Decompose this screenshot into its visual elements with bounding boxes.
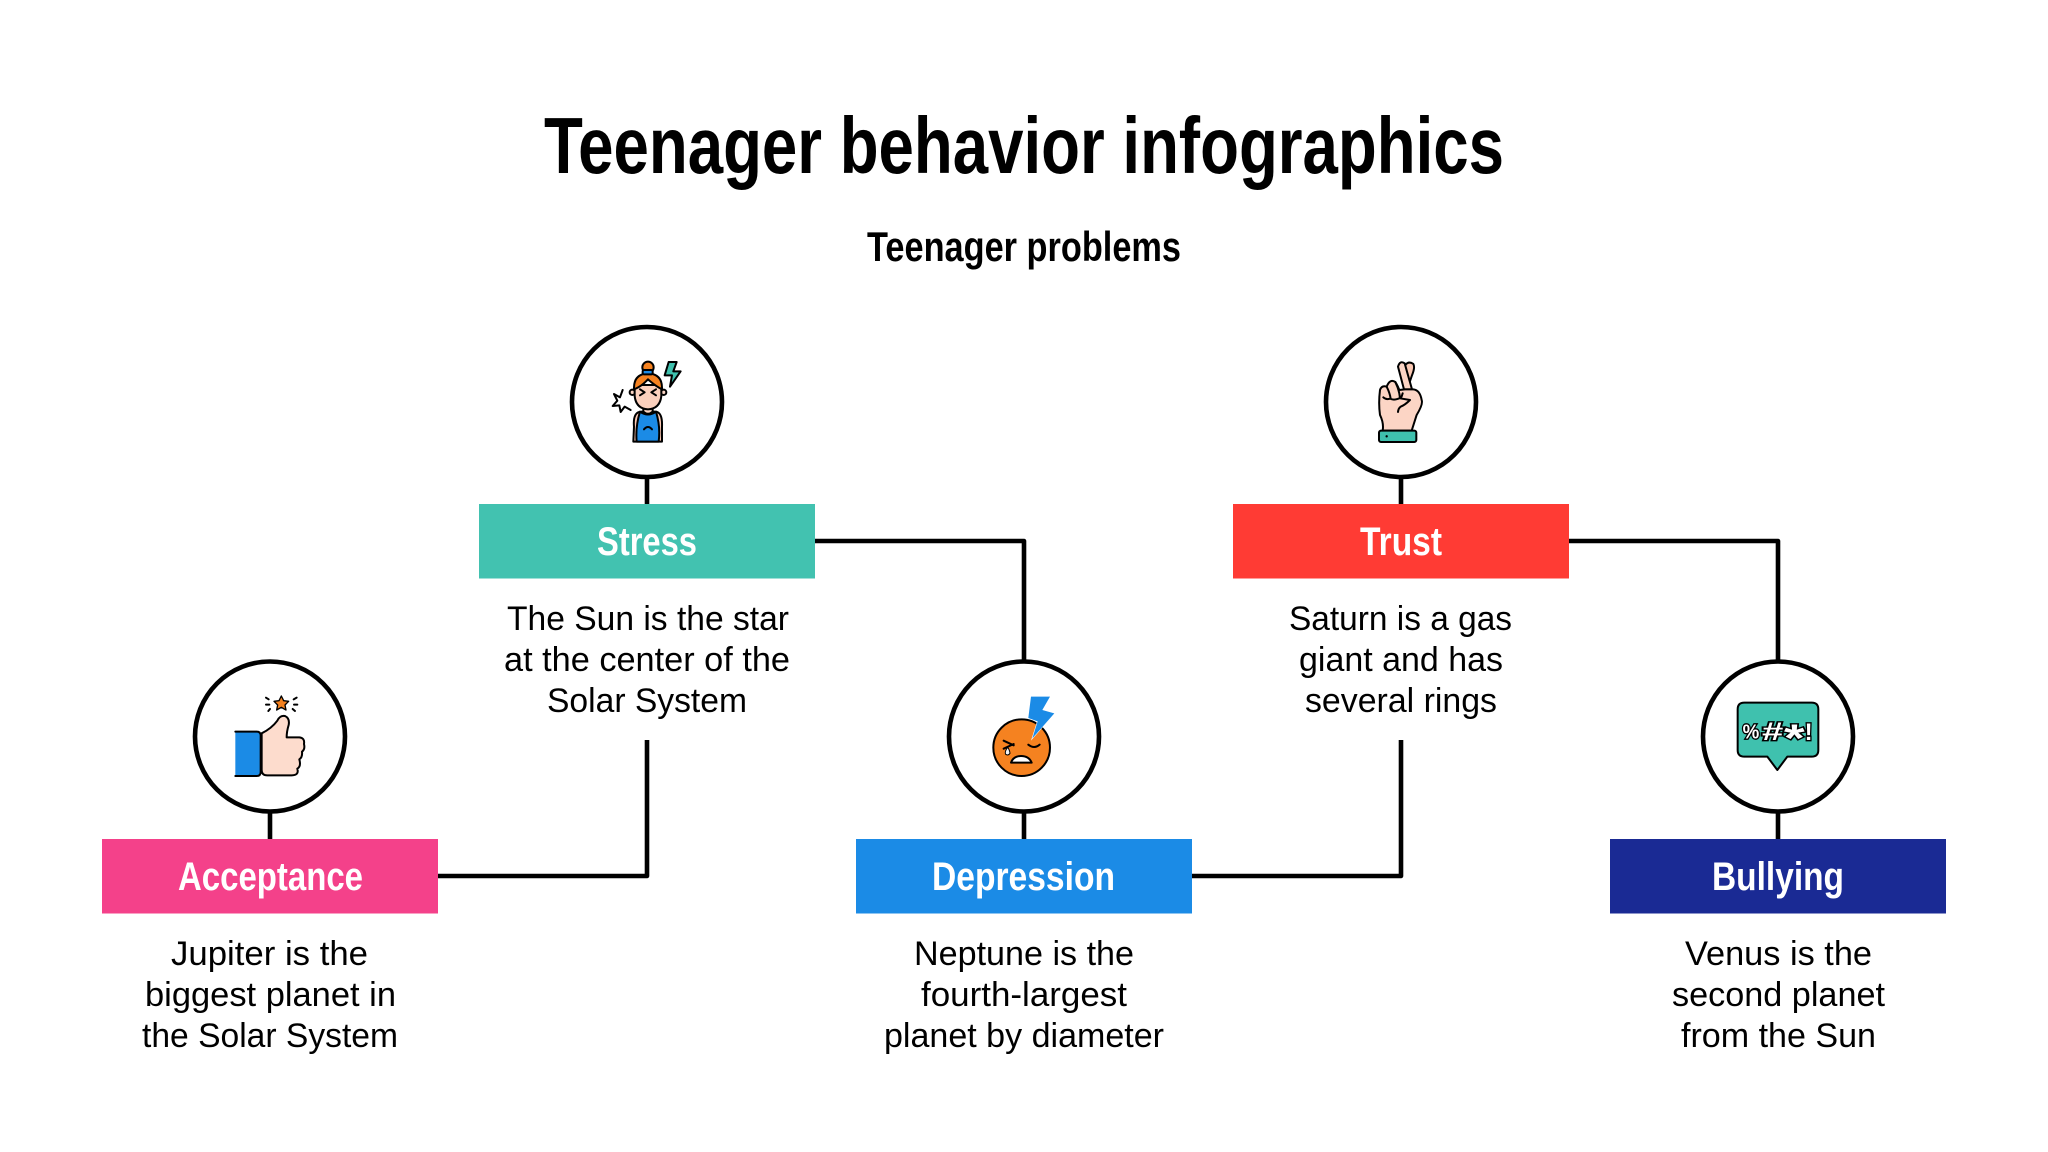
label: Depression: Depression	[932, 855, 1115, 899]
text: acceptance description: biggest planet in	[145, 976, 396, 1014]
text: trust description: giant and has	[1299, 641, 1503, 679]
text: stress description: at the center of the	[504, 641, 790, 679]
label: Bullying	[1610, 839, 1946, 914]
panel: stress	[479, 327, 815, 720]
label: Acceptance: Acceptance	[178, 855, 363, 899]
connector: trust to bullying	[1569, 541, 1778, 662]
label: Depression	[856, 839, 1192, 914]
text: trust description	[1289, 600, 1512, 720]
subtitle: Teenager problems	[867, 223, 1181, 270]
label: Bullying: Bullying	[1712, 855, 1844, 899]
connector: acceptance to stress	[438, 740, 647, 876]
icon: crossed fingers	[1379, 362, 1422, 442]
label: Acceptance	[102, 839, 438, 914]
text: trust description: Saturn is a gas	[1289, 600, 1512, 638]
icon: speech bubble with symbols: *	[1784, 716, 1806, 760]
connector: depression to trust	[1192, 740, 1401, 876]
icon: thumbs up	[235, 696, 304, 776]
icon: speech bubble with symbols: !	[1805, 719, 1813, 746]
text: bullying description: from the Sun	[1681, 1017, 1876, 1055]
text: trust description: several rings	[1305, 682, 1497, 720]
text: bullying description: Venus is the	[1685, 935, 1872, 973]
text: stress description: The Sun is the star	[507, 600, 789, 638]
icon: stressed girl	[613, 362, 681, 442]
text: depression description: fourth-largest	[921, 976, 1128, 1014]
label: Trust	[1233, 504, 1569, 578]
text: acceptance description	[142, 935, 398, 1055]
icon: speech bubble with symbols: %	[1743, 722, 1760, 744]
label: Stress	[479, 504, 815, 578]
icon: speech bubble with symbols	[1738, 703, 1818, 770]
panel: trust	[1233, 327, 1569, 720]
label: Trust: Trust	[1360, 520, 1442, 564]
icon: speech bubble with symbols: #	[1762, 718, 1783, 746]
panel: acceptance	[102, 662, 438, 1055]
label: Stress: Stress	[597, 520, 697, 564]
panel: depression	[856, 662, 1192, 1055]
text: bullying description: second planet	[1672, 976, 1886, 1014]
text: bullying description	[1672, 935, 1886, 1055]
text: acceptance description: Jupiter is the	[171, 935, 368, 973]
text: depression description: Neptune is the	[914, 935, 1134, 973]
text: stress description: Solar System	[547, 682, 747, 720]
panel: bullying	[1610, 662, 1946, 1055]
text: acceptance description: the Solar System	[142, 1017, 398, 1055]
icon: crying face with lightning	[993, 697, 1055, 776]
connector: stress to depression	[815, 541, 1024, 662]
text: depression description: planet by diameter	[884, 1017, 1164, 1055]
title: Teenager behavior infographics	[544, 101, 1504, 190]
text: depression description	[884, 935, 1164, 1055]
text: stress description	[504, 600, 790, 720]
